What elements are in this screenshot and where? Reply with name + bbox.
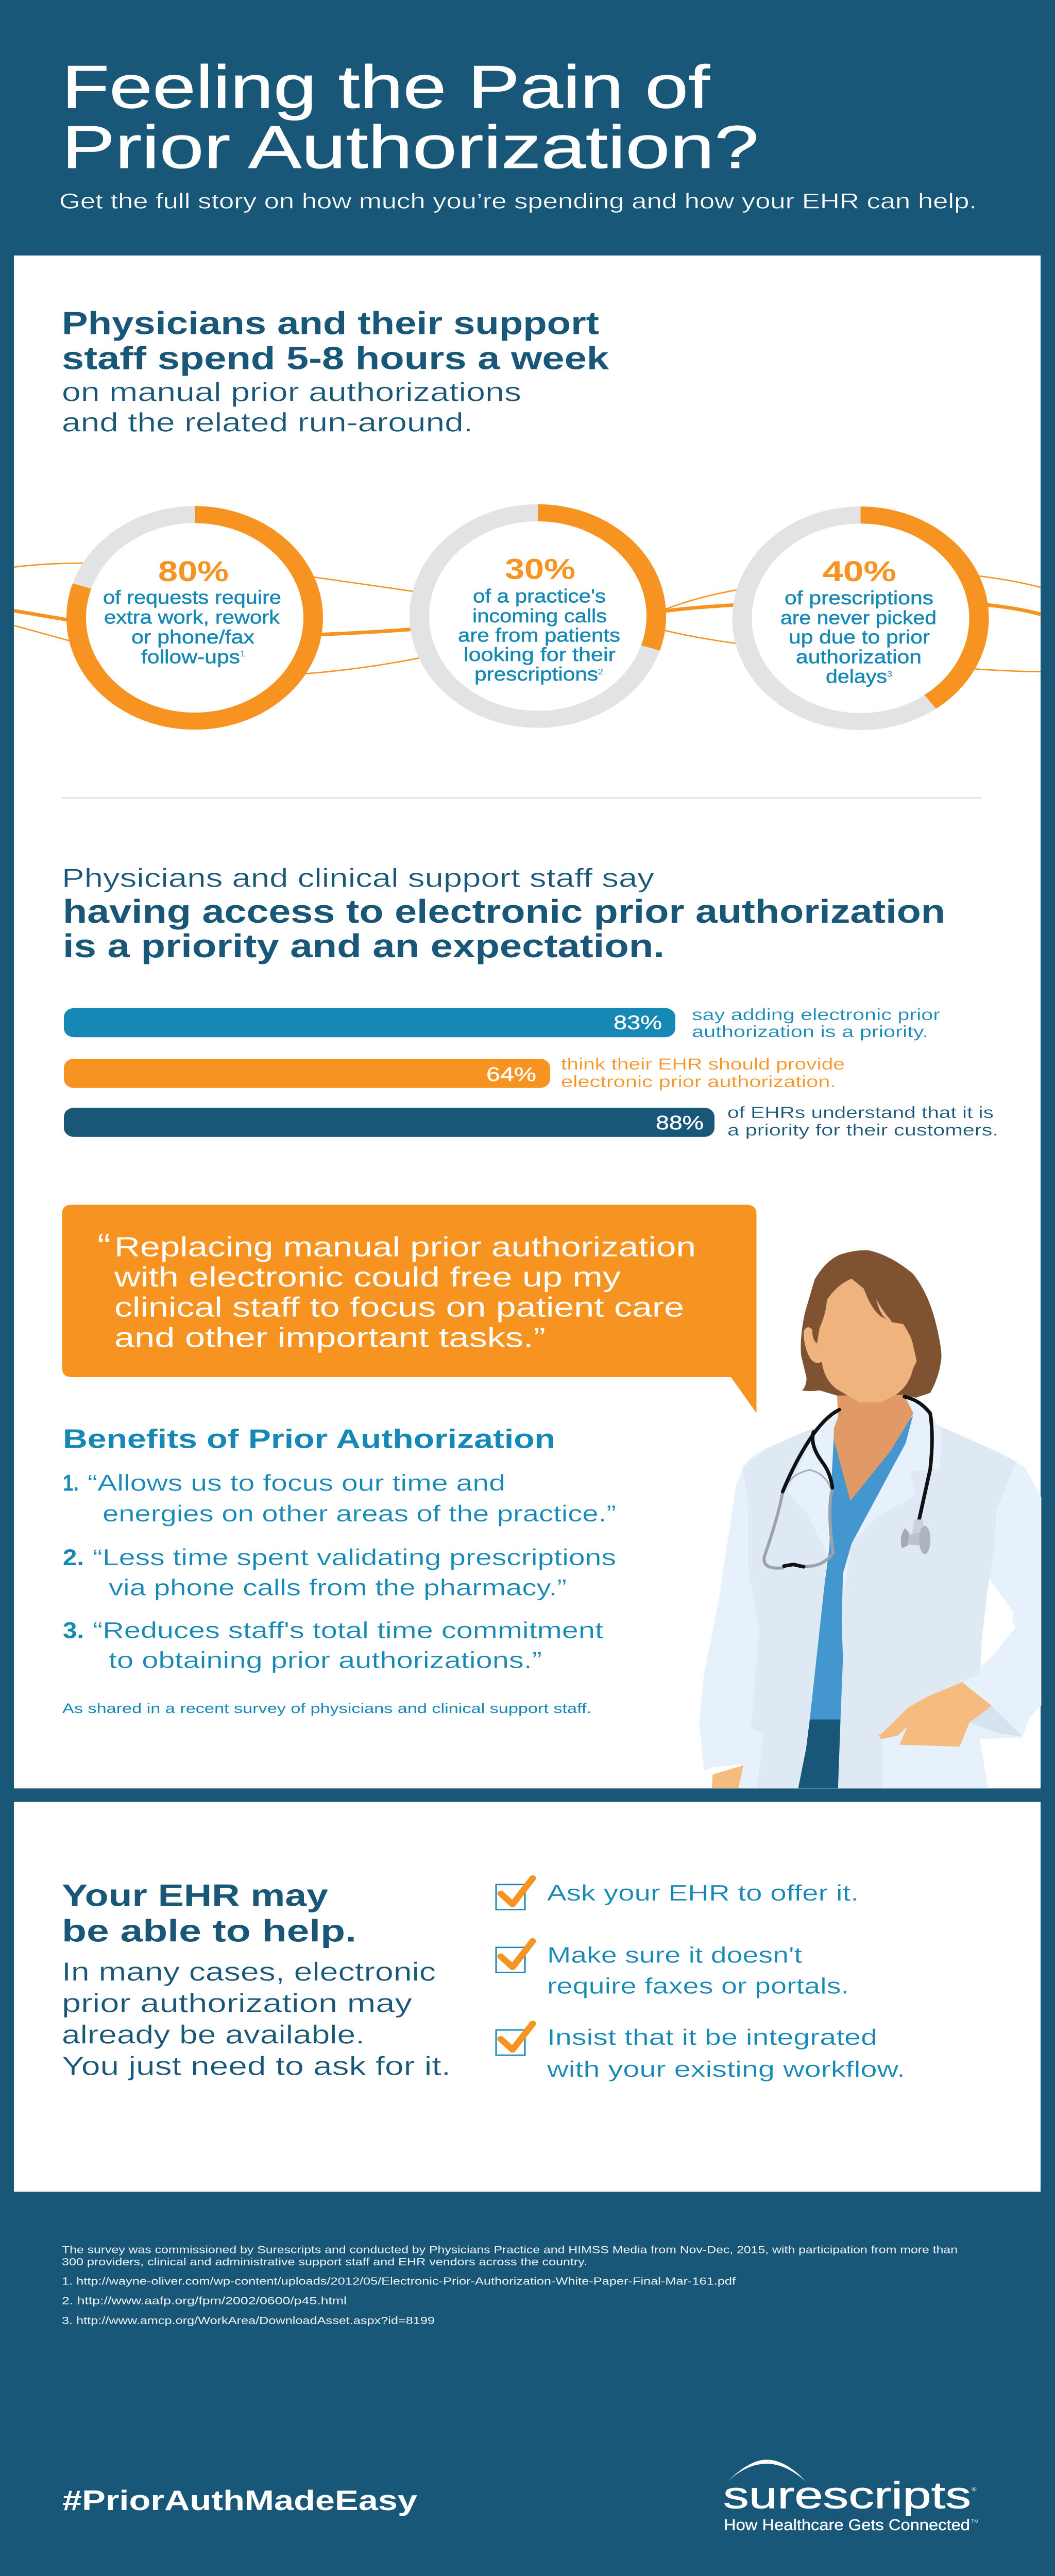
bar: 88%: of EHRs understand that it is: [727, 1104, 994, 1122]
bar: 83%: 83%: [614, 1011, 662, 1033]
neck: [834, 1387, 913, 1501]
heading: your EHR: be able to help.: [62, 1913, 356, 1948]
list: benefits: 3.: [63, 1618, 84, 1643]
footnotes: 3. http://www.amcp.org/WorkArea/DownloadAsset.aspx?id=8199: [62, 2314, 435, 2327]
list: benefits: [63, 1470, 616, 1673]
footnotes: 300 providers, clinical and administrative support staff and EHR vendors across the country.: [62, 2256, 587, 2268]
chart: 40% ring: 40%: [823, 555, 896, 587]
chart: 80% ring: follow-ups: [141, 647, 240, 668]
gap between arm and body: [981, 1579, 1016, 1667]
checklist item 1: [496, 1878, 859, 1910]
logo: surescripts: How Healthcare Gets Connected: [724, 2516, 970, 2534]
callout: speech bubble quote: Replacing manual prior authorization: [114, 1231, 696, 1263]
bar: 83%: say adding electronic prior: [692, 1006, 940, 1024]
chart: 40% ring: up due to prior: [789, 626, 930, 648]
bar chart: survey results: [64, 1006, 998, 1140]
note: survey source: As shared in a recent survey of physicians and clinical support staff.: [62, 1701, 591, 1716]
list: benefits: “Allows us to focus our time and: [88, 1470, 505, 1496]
illustration: doctor with stethoscope: [699, 1250, 1041, 1788]
list: benefits: “Less time spent validating prescriptions: [93, 1545, 616, 1570]
chart: 30% ring: incoming calls: [472, 605, 607, 626]
callout: speech bubble quote: “: [97, 1227, 111, 1266]
pocket: [882, 1739, 988, 1788]
bar: 83%: [64, 1006, 940, 1041]
chart: 40% ring: delays: [826, 666, 887, 687]
chart: 40% ring: authorization: [796, 647, 922, 668]
logo: surescripts: TM: [971, 2519, 979, 2523]
chart: 80% ring: 1: [240, 649, 245, 658]
bar: 88%: 88%: [656, 1112, 704, 1133]
bar: 83%: authorization is a priority.: [692, 1023, 928, 1041]
heading: electronic prior authorization priority: [62, 863, 945, 964]
title: [62, 53, 759, 181]
chart: 30% ring: of a practice's: [473, 586, 606, 607]
footnotes: 2. http://www.aafp.org/fpm/2002/0600/p45.html: [62, 2295, 347, 2307]
heading: benefits of prior authorization: Benefits of Prior Authorization: [63, 1423, 555, 1454]
chart: 80% ring: [76, 515, 313, 721]
chart: 80% ring: extra work, rework: [104, 607, 280, 628]
checklist item 3: Insist that it be integrated: [547, 2025, 877, 2049]
list: benefits: 1.: [63, 1470, 79, 1496]
stethoscope: [764, 1397, 932, 1568]
heading: your EHR: [62, 1878, 356, 1948]
heading: electronic prior authorization priority: Physicians and clinical support staff say: [62, 863, 655, 892]
subtitle: Get the full story on how much you’re spending and how your EHR can help.: [59, 189, 977, 213]
heading: physicians hours: [62, 306, 609, 437]
bar: 64%: think their EHR should provide: [561, 1055, 845, 1073]
list: benefits: 2.: [63, 1545, 84, 1570]
chart: 30% ring: prescriptions: [474, 664, 598, 685]
chart: 40% ring: [742, 515, 979, 722]
bar: 88%: [64, 1104, 998, 1140]
coat: [699, 1398, 1041, 1788]
callout: speech bubble quote: with electronic could free up my: [114, 1262, 621, 1293]
callout: speech bubble quote: [62, 1205, 756, 1413]
heading: physicians hours: Physicians and their support: [62, 306, 599, 341]
title: Feeling the Pain of: [62, 53, 710, 121]
footnotes: [62, 2244, 958, 2327]
title: Prior Authorization?: [62, 113, 759, 181]
list: benefits: “Reduces staff's total time commitment: [93, 1618, 603, 1643]
checklist item 2: Make sure it doesn't: [547, 1942, 802, 1968]
hair: [801, 1250, 942, 1398]
checklist item 2: require faxes or portals.: [547, 1974, 849, 1998]
chart: 80% ring: or phone/fax: [131, 626, 254, 648]
bar: 64%: electronic prior authorization.: [561, 1073, 836, 1091]
chart: 40% ring: of prescriptions: [785, 588, 933, 608]
chart: 30% ring: are from patients: [458, 625, 620, 646]
callout: speech bubble quote: and other important tasks.”: [114, 1322, 546, 1353]
trousers: [798, 1719, 841, 1788]
checklist item 2: [496, 1941, 849, 1998]
scrubs: [810, 1415, 913, 1719]
hashtag: #PriorAuthMadeEasy: [62, 2485, 417, 2516]
logo: surescripts: surescripts: [723, 2474, 971, 2516]
bar: 88%: a priority for their customers.: [727, 1121, 998, 1140]
chart: 30% ring: looking for their: [464, 644, 616, 665]
chart: 30% ring: 30%: [505, 553, 575, 585]
orbit lines connecting the stat rings: [14, 563, 1041, 674]
heading: your EHR: Your EHR may: [62, 1878, 328, 1913]
checklist item 1: Ask your EHR to offer it.: [547, 1880, 859, 1906]
ear: [804, 1327, 822, 1363]
heading: electronic prior authorization priority: is a priority and an expectation.: [63, 928, 665, 964]
cuff: [969, 1706, 1023, 1737]
heading: physicians hours: and the related run-around.: [62, 407, 473, 437]
footnotes: The survey was commissioned by Surescripts and conducted by Physicians Practice and HIMSS Media from Nov-Dec, 2015, with participation from more than: [62, 2244, 958, 2256]
chest piece: [901, 1519, 930, 1554]
chart: 80% ring: of requests require: [103, 587, 281, 608]
chart: 80% ring: 80%: [158, 555, 229, 587]
logo: surescripts: ®: [972, 2486, 977, 2493]
logo: surescripts: [723, 2460, 979, 2534]
bar: 64%: 64%: [486, 1063, 536, 1085]
chart: 30% ring: 2: [598, 667, 603, 676]
body text: [62, 1957, 451, 2081]
hand: [879, 1682, 992, 1747]
face: [817, 1279, 916, 1402]
checklist item 3: [496, 2024, 905, 2081]
body text: In many cases, electronic: [62, 1957, 436, 1986]
callout: speech bubble quote: clinical staff to focus on patient care: [114, 1292, 684, 1323]
chart: 40% ring: are never picked: [780, 607, 937, 629]
chart: 30% ring: [419, 513, 656, 719]
panel: main white panel: [14, 256, 1041, 1788]
checklist item 3: with your existing workflow.: [547, 2057, 905, 2081]
heading: physicians hours: staff spend 5-8 hours a week: [62, 341, 609, 376]
heading: physicians hours: on manual prior authorizations: [62, 377, 521, 406]
body text: You just need to ask for it.: [62, 2052, 451, 2081]
chart: 40% ring: 3: [887, 669, 892, 679]
footnotes: 1. http://wayne-oliver.com/wp-content/uploads/2012/05/Electronic-Prior-Authorization-White-Paper-Final-Mar-161.pdf: [62, 2275, 736, 2287]
bar: 64%: [64, 1055, 845, 1091]
panel: your EHR may be able to help: [14, 1802, 1041, 2192]
body text: prior authorization may: [62, 1989, 413, 2018]
list: benefits: via phone calls from the pharmacy.”: [109, 1575, 567, 1601]
body text: already be available.: [62, 2020, 365, 2049]
list: benefits: energies on other areas of the practice.”: [103, 1501, 616, 1527]
heading: electronic prior authorization priority: having access to electronic prior authorization: [63, 893, 945, 930]
list: benefits: to obtaining prior authorizations.”: [109, 1648, 542, 1673]
